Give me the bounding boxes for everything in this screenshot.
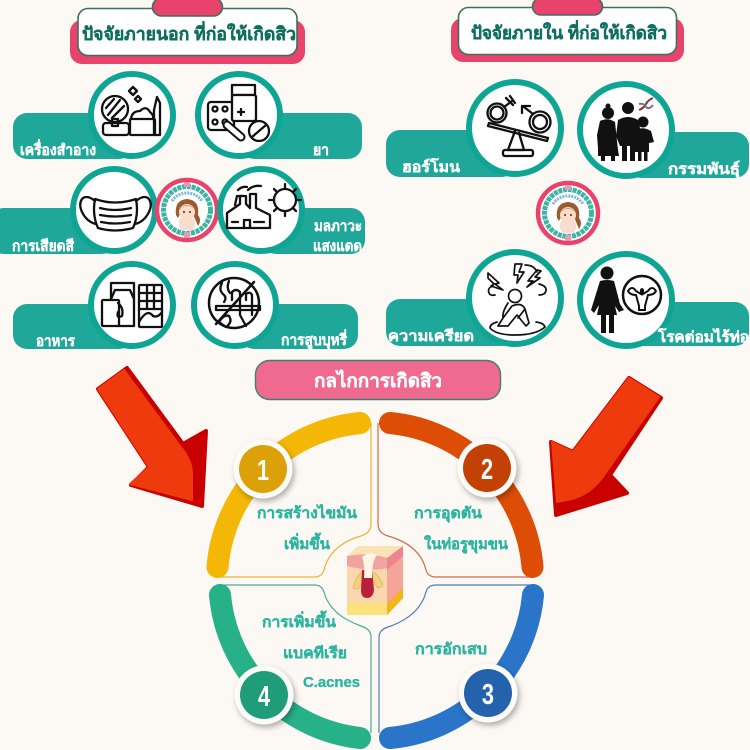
heading: acne mechanism: กลไกการเกิดสิว	[314, 369, 442, 392]
logo left	[157, 180, 217, 240]
factor: genetics: กรรมพันธุ์	[668, 160, 740, 179]
factor: medicine: ยา	[313, 142, 329, 159]
factor: genetics	[580, 84, 749, 179]
icon: skin pore cross-section	[347, 546, 403, 615]
mechanism cycle	[218, 423, 533, 738]
icon: food	[102, 283, 162, 327]
icon: cosmetics	[102, 87, 160, 135]
factor: food: อาหาร	[36, 333, 76, 350]
factor: pollution and sunlight: แสงแดด	[313, 238, 362, 255]
heading: internal factors: ปัจจัยภายใน ที่ก่อให้เกิดสิว	[471, 20, 667, 43]
heading: acne mechanism	[256, 360, 500, 400]
icon: hormone balance	[488, 96, 550, 156]
icon: factory and sun	[227, 184, 301, 228]
factor: friction: การเสียดสี	[12, 238, 75, 255]
heading: external factors	[70, 0, 305, 64]
segment 1: sebum: 1	[257, 455, 269, 487]
factor: smoking	[194, 264, 358, 350]
arrow: left	[98, 368, 206, 506]
segment 4: bacteria: C.acnes	[303, 674, 360, 691]
factor: stress: ความเครียด	[388, 328, 474, 345]
segment 2: clogging	[378, 423, 532, 577]
segment 3: inflammation: 3	[482, 679, 494, 711]
factor: endocrine disease	[580, 254, 749, 346]
heading: external factors: ปัจจัยภายนอก ที่ก่อให้เกิดสิว	[82, 21, 296, 44]
segment 4: bacteria: การเพิ่มขึ้น	[262, 610, 337, 631]
segment 4: bacteria: แบคทีเรีย	[283, 645, 347, 662]
icon: stress	[488, 264, 546, 335]
segment 1: sebum: การสร้างไขมัน	[257, 503, 358, 522]
factor: pollution and sunlight: มลภาวะ	[314, 218, 362, 235]
icon: family and DNA	[597, 98, 654, 161]
segment 3: inflammation	[379, 585, 533, 738]
icon: face mask	[80, 197, 151, 230]
factor: hormones	[386, 82, 561, 177]
segment 1: sebum: เพิ่มขึ้น	[284, 532, 331, 553]
segment 1: sebum	[218, 423, 371, 577]
segment 2: clogging: การอุดตัน	[414, 505, 483, 523]
segment 3: inflammation: การอักเสบ	[415, 641, 487, 658]
factor: stress	[386, 252, 561, 346]
factor: friction	[0, 169, 155, 255]
factor: hormones: ฮอร์โมน	[402, 157, 461, 176]
icon: medicine	[208, 85, 269, 141]
factor: pollution and sunlight	[220, 169, 365, 255]
heading: internal factors	[451, 0, 684, 62]
segment 4: bacteria	[220, 585, 371, 738]
factor: cosmetics: เครื่องสำอาง	[20, 139, 96, 159]
factor: endocrine disease: โรคต่อมไร้ท่อ	[657, 327, 749, 346]
segment 4: bacteria: 4	[258, 681, 271, 713]
factor: medicine	[198, 74, 362, 159]
arrow: right	[551, 378, 661, 515]
segment 2: clogging: 2	[481, 454, 493, 486]
segment 2: clogging: ในท่อรูขุมขน	[424, 535, 509, 554]
factor: food	[13, 264, 173, 350]
factor: smoking: การสูบบุหรี่	[281, 329, 348, 350]
factor: cosmetics	[13, 74, 173, 159]
logo right	[538, 183, 598, 243]
icon: woman and uterus	[591, 266, 661, 333]
icon: no smoking	[209, 278, 260, 328]
